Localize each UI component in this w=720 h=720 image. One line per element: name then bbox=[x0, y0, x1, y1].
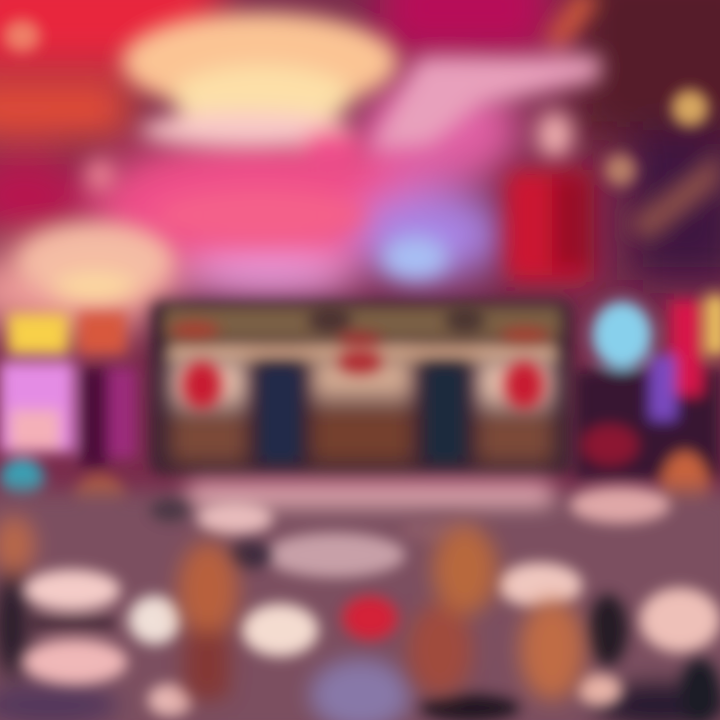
slot machine reels bbox=[170, 355, 554, 464]
chandelier: large bbox=[122, 12, 398, 241]
casino floor and tables bbox=[0, 482, 720, 720]
slot machine bbox=[150, 300, 572, 475]
left column lights bbox=[0, 312, 136, 520]
dark gaps between tables bbox=[150, 498, 720, 720]
slot machine red symbols bbox=[182, 350, 544, 409]
red curtain bbox=[505, 170, 593, 282]
chandelier: small left bbox=[17, 159, 173, 304]
table tops and chips bbox=[23, 487, 720, 716]
background: ceiling and walls bbox=[0, 0, 720, 335]
right column lights bbox=[575, 295, 720, 528]
slot machine top ornaments bbox=[170, 306, 550, 348]
red casino chip bbox=[342, 596, 398, 640]
slot machine dark columns bbox=[260, 366, 464, 462]
slot machine body bbox=[150, 300, 572, 475]
figures in orange bbox=[178, 526, 584, 700]
light beams and sparkles, upper right bbox=[370, 0, 720, 280]
